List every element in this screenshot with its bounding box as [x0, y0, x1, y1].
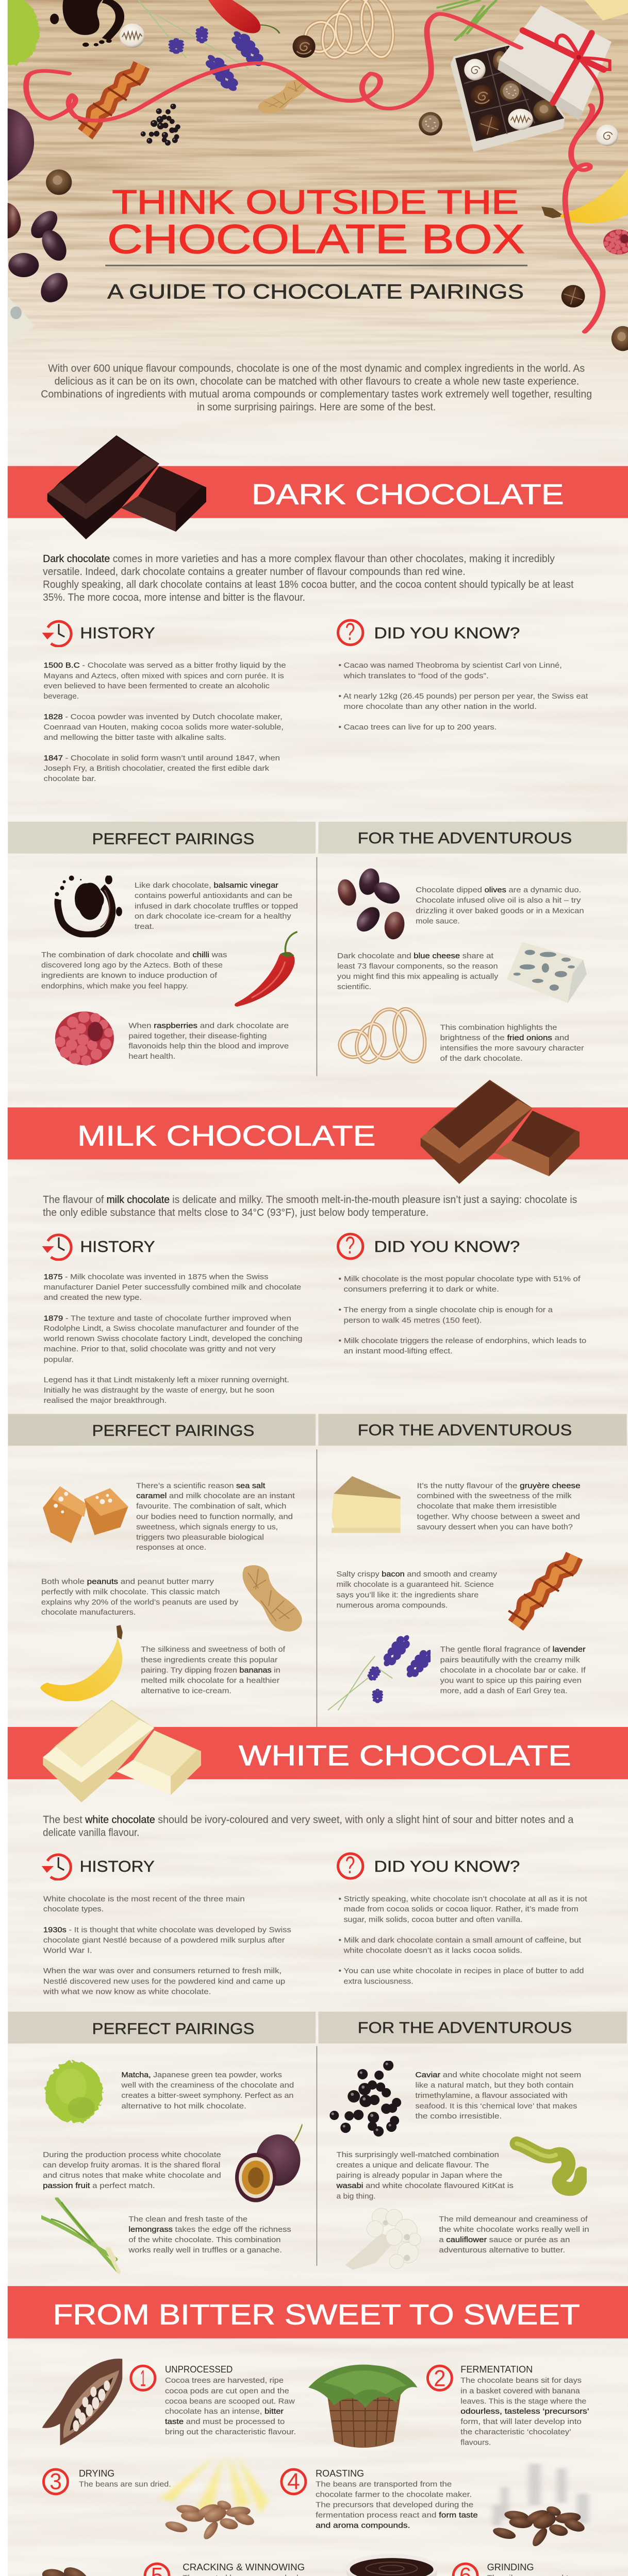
- text: history timeline: manufacturer Daniel Peter successfully combined milk and chocolate: [44, 1283, 301, 1292]
- pairing: gruyere cheese: chocolate that make them irresistible: [417, 1502, 557, 1511]
- text: did you know facts: [338, 1894, 587, 1986]
- text: did you know facts: person to walk 45 metres (150 feet).: [343, 1316, 482, 1325]
- pairing: matcha: well with the creaminess of the chocolate and: [121, 2081, 294, 2090]
- hero section: [0, 0, 628, 413]
- pairing: blue cheese: you might find this mix appealing is actually: [337, 972, 499, 981]
- text: history timeline: 1847 - Chocolate in solid form wasn’t until around 1847, when: [44, 754, 280, 762]
- pairing: raspberries: paired together, their disease-fighting: [128, 1031, 267, 1040]
- header: perfect pairings and adventurous: [8, 2012, 627, 2043]
- text: history timeline: Nestlé discovered new uses for the powdered kind and came up: [43, 1977, 285, 1986]
- step 2: fermentation: in a basket covered with banana: [460, 2386, 580, 2395]
- header: perfect pairings and adventurous: PERFECT PAIRINGS: [92, 1422, 254, 1439]
- pairing: gruyere cheese: combined with the sweetness of the milk: [417, 1492, 572, 1500]
- pairing: passion fruit: and citrus notes that make white chocolate and: [43, 2171, 221, 2180]
- step 6: grinding: [346, 2554, 589, 2576]
- pairing: passion fruit: During the production process white chocolate: [43, 2150, 221, 2159]
- text: history timeline: Coenraad van Houten, making cocoa solids more water-soluble,: [44, 723, 284, 732]
- step 1: unprocessed: UNPROCESSED: [165, 2365, 233, 2375]
- pairing: peanuts: chocolate manufacturers.: [41, 1608, 136, 1617]
- pairing: banana: melted milk chocolate for a healthier: [141, 1676, 280, 1685]
- text: history timeline: Mayans and Aztecs, often mixed with spices and corn purée. It is: [44, 671, 284, 680]
- pairing: fried onions: This combination highlights the: [440, 1023, 557, 1032]
- step 2: fermentation: flavours.: [460, 2438, 491, 2447]
- text: history timeline: beverage.: [44, 692, 79, 701]
- pairing: wasabi: creates a unique and delicate flavour. The: [337, 2161, 489, 2170]
- pairing: lavender: The gentle floral fragrance of lavender: [440, 1645, 586, 1654]
- header: perfect pairings and adventurous: PERFECT PAIRINGS: [92, 2021, 254, 2038]
- pairing: lemongrass: [41, 2198, 291, 2272]
- step 4: roasting: and aroma compounds.: [316, 2521, 410, 2530]
- illustration: onion rings: [301, 0, 398, 61]
- text: did you know facts: which translates to “food of the gods”.: [343, 671, 489, 680]
- pairing: caviar: like a natural match, but they both contain: [416, 2081, 573, 2090]
- pairing: sea salt caramel: There’s a scientific reason sea salt: [136, 1481, 266, 1490]
- illustration: chilli: [208, 0, 279, 33]
- illustration: balsamic splash: [50, 0, 120, 47]
- pairing: matcha: alternative to hot milk chocolate.: [121, 2102, 246, 2110]
- step 3: drying: 3: [49, 2469, 62, 2494]
- header: perfect pairings and adventurous: [8, 1414, 627, 1446]
- step 4: roasting: The precursors that developed during the: [316, 2500, 473, 2509]
- text: history timeline: Initially he was distraught by the waste of energy, but he soon: [44, 1386, 274, 1395]
- pairing: lemongrass: of the white chocolate. This combination: [128, 2235, 281, 2244]
- step 1: unprocessed: cocoa pods are cut open and the: [165, 2386, 289, 2395]
- illustration: raspberry: [603, 229, 628, 255]
- text: history timeline: 1828 - Cocoa powder was invented by Dutch chocolate maker,: [44, 713, 283, 721]
- icon: question mark: ?: [345, 618, 355, 645]
- step 4: roasting: 4: [287, 2469, 300, 2494]
- text: history timeline: realised the major breakthrough.: [44, 1396, 167, 1405]
- heading: history: HISTORY: [80, 1858, 155, 1875]
- step 2: fermentation: form, that will later develop into: [460, 2417, 582, 2426]
- pairing: blue cheese: Dark chocolate and blue cheese share at: [337, 952, 494, 960]
- step 6: grinding: GRINDING: [487, 2562, 534, 2572]
- heading: history: HISTORY: [80, 624, 155, 642]
- text: did you know facts: sugar, milk solids, cocoa butter and often vanilla.: [343, 1915, 523, 1924]
- pairing: peanuts: [41, 1565, 302, 1632]
- illustration: caviar: [141, 104, 180, 146]
- pairing: balsamic vinegar: treat.: [135, 922, 154, 931]
- banner: white chocolate: [8, 1700, 628, 1802]
- heading: did you know: DID YOU KNOW?: [374, 624, 520, 642]
- icon: question mark: [338, 618, 363, 645]
- pairing: chilli: discovered long ago by the Aztecs. Both of these: [41, 961, 223, 970]
- icon: history clock: [42, 1855, 71, 1879]
- intro paragraph: [43, 553, 573, 603]
- step 1: unprocessed: bring out the characteristic flavour.: [165, 2428, 296, 2436]
- step 1: unprocessed: chocolate has an intense, bitter: [165, 2407, 284, 2416]
- illustration: red ribbon: [26, 14, 603, 332]
- illustration: banana: [541, 168, 628, 223]
- header: perfect pairings and adventurous: [8, 822, 627, 854]
- pairing: blue cheese: scientific.: [337, 982, 371, 991]
- intro paragraph: delicate vanilla flavour.: [43, 1827, 139, 1838]
- pairing: balsamic vinegar: contains powerful antioxidants and can be: [135, 891, 292, 900]
- pairing: blue cheese: [337, 942, 587, 1003]
- text: did you know facts: more chocolate than any other nation in the world.: [343, 702, 537, 711]
- illustration: white truffle: [120, 24, 145, 48]
- text: history timeline: [44, 661, 286, 783]
- illustration: milk truffle: [419, 112, 442, 135]
- text: history timeline: 1875 - Milk chocolate was invented in 1875 when the Swiss: [44, 1273, 268, 1281]
- panel: dark chocolate: [8, 435, 628, 1076]
- pairing: fried onions: [336, 1006, 584, 1065]
- pairing: caviar: Caviar and white chocolate might not seem: [416, 2071, 581, 2079]
- illustration: grey truffle: [612, 326, 628, 351]
- pairing: raspberries: When raspberries and dark chocolate are: [128, 1021, 289, 1030]
- pairing: banana: [40, 1625, 286, 1702]
- header: perfect pairings and adventurous: PERFECT PAIRINGS: [92, 831, 254, 848]
- pairing: olives: Chocolate dipped olives are a dynamic duo.: [416, 886, 581, 894]
- text: did you know facts: white chocolate doesn’t as it lacks cocoa solids.: [343, 1946, 522, 1955]
- pairing: raspberries: [55, 1011, 289, 1065]
- pairing: sea salt caramel: favourite. The combination of salt, which: [136, 1502, 286, 1511]
- pairing: passion fruit: passion fruit a perfect match.: [43, 2181, 155, 2190]
- illustration: plain truffle: [561, 285, 585, 308]
- pairing: chilli: endorphins, which make you feel happy.: [41, 981, 188, 990]
- step 2: fermentation: FERMENTATION: [460, 2365, 533, 2375]
- text: history timeline: chocolate giant Nestlé because of a powdered milk surplus after: [43, 1936, 285, 1944]
- pairing: bacon: Salty crispy bacon and smooth and creamy: [337, 1570, 497, 1579]
- illustration: matcha: [0, 0, 39, 65]
- step 5: cracking and winnowing: [41, 2562, 319, 2576]
- illustration: white swirl truffle: [596, 125, 618, 146]
- icon: history clock: [42, 621, 71, 646]
- pairing: lavender: more, add a dash of Earl Grey tea.: [440, 1687, 568, 1696]
- illustration: lemongrass: [437, 0, 497, 41]
- step 4: roasting: The beans are transported from the: [316, 2480, 452, 2488]
- pairing: passion fruit: [43, 2124, 302, 2202]
- pairing: sea salt caramel: [43, 1481, 295, 1552]
- pairing: bacon: says you’ll like it: the ingredients share: [337, 1590, 478, 1599]
- pairing: banana: alternative to ice-cream.: [141, 1687, 232, 1696]
- pairing: peanuts: Both whole peanuts and peanut butter marry: [41, 1577, 214, 1586]
- intro text: in some surprising pairings. Here are some of the best.: [197, 401, 436, 413]
- pairing: banana: these ingredients create this popular: [141, 1655, 278, 1664]
- pairing: peanuts: explains why 20% of the world’s peanuts are used by: [41, 1598, 238, 1606]
- panel: milk chocolate: [8, 1080, 628, 1757]
- pairing: balsamic vinegar: on dark chocolate ice-cream for a healthy: [135, 912, 291, 921]
- pairing: caviar: trimethylamine, a flavour associated with: [416, 2091, 568, 2100]
- pairing: wasabi: [336, 2143, 582, 2200]
- text: history timeline: World War I.: [43, 1946, 92, 1955]
- pairing: lemongrass: works really well in truffles or a ganache.: [128, 2246, 282, 2255]
- step 2: fermentation: the characteristic ‘chocolatey’: [460, 2428, 571, 2436]
- pairing: balsamic vinegar: [55, 875, 298, 935]
- pairing: gruyere cheese: It’s the nutty flavour of the gruyère cheese: [417, 1481, 581, 1490]
- title: [107, 183, 525, 262]
- illustration: dark truffle: [292, 35, 316, 58]
- step 3: drying: [43, 2454, 268, 2541]
- text: history timeline: When the war was over and consumers returned to fresh milk,: [43, 1967, 282, 1975]
- pairing: sea salt caramel: responses at once.: [136, 1543, 206, 1552]
- pairing: sea salt caramel: caramel and milk chocolate are an instant: [136, 1492, 295, 1500]
- text: history timeline: even believed to have been fermented to create an alcoholic: [44, 682, 270, 690]
- text: history timeline: and mellowing the bitter taste with alkaline salts.: [44, 733, 226, 742]
- illustration: glossy truffle: [46, 170, 72, 195]
- text: history timeline: White chocolate is the most recent of the three main: [43, 1894, 245, 1903]
- pairing: passion fruit: can develop fruity aromas. It is the shared floral: [43, 2161, 220, 2170]
- text: history timeline: and created the new type.: [44, 1293, 142, 1302]
- step 2: fermentation: The chocolate beans sit for days: [460, 2376, 582, 2385]
- step 3: drying: DRYING: [79, 2468, 114, 2479]
- icon: question mark: [338, 1852, 363, 1878]
- pairing: lemongrass: lemongrass takes the edge off the richness: [128, 2225, 291, 2234]
- pairing: sea salt caramel: triggers two pleasurable biological: [136, 1533, 264, 1541]
- pairing: wasabi: wasabi and white chocolate flavoured KitKat is: [336, 2181, 514, 2190]
- icon: question mark: ?: [345, 1231, 355, 1259]
- text: history timeline: world renown Swiss chocolate factory Lindt, developed the conching: [43, 1334, 302, 1343]
- pairing: caviar: [329, 2060, 581, 2137]
- intro paragraph: [43, 1194, 577, 1218]
- step 4: roasting: [282, 2464, 589, 2549]
- text: history timeline: 1930s - It is thought that white chocolate was developed by Swiss: [43, 1925, 291, 1934]
- illustration: bacon: [78, 65, 142, 134]
- heading: did you know: DID YOU KNOW?: [374, 1858, 520, 1875]
- step 2: fermentation: 2: [434, 2366, 446, 2392]
- pairing: caviar: the combo irresistible.: [416, 2112, 502, 2121]
- text: history timeline: machine. Prior to that, solid chocolate was gritty and not very: [44, 1345, 276, 1353]
- text: did you know facts: [338, 661, 588, 732]
- pairing: sea salt caramel: our bodies need to function normally, and: [136, 1512, 293, 1521]
- step 5: cracking and winnowing: CRACKING & WINNOWING: [183, 2562, 305, 2572]
- pairing: olives: mole sauce.: [416, 917, 460, 925]
- step 1: unprocessed: taste and must be processed to: [165, 2417, 285, 2426]
- text: history timeline: chocolate types.: [43, 1905, 104, 1913]
- text: history timeline: with what we now know as white chocolate.: [43, 1987, 211, 1996]
- illustration: peanut: [258, 80, 307, 113]
- text: history timeline: 1879 - The texture and taste of chocolate further improved when: [44, 1314, 291, 1323]
- banner: from bitter sweet to sweet: [8, 2286, 628, 2338]
- text: history timeline: Legend has it that Lindt mistakenly left a mixer running overnight.: [44, 1376, 289, 1384]
- pairing: matcha: creates a bitter-sweet symphony. Perfect as an: [121, 2091, 293, 2100]
- illustration: olives: [8, 203, 72, 304]
- pairing: cauliflower: [345, 2208, 589, 2270]
- step 1: unprocessed: 1: [140, 2366, 146, 2392]
- text: did you know facts: • The energy from a single chocolate chip is enough for a: [338, 1306, 553, 1314]
- pairing: matcha: [45, 2062, 294, 2123]
- pairing: balsamic vinegar: infused in dark chocolate truffles or topped: [135, 902, 298, 910]
- illustration: plum: [8, 108, 34, 181]
- step 1: unprocessed: cocoa beans are scooped out. Raw: [165, 2397, 295, 2405]
- text: did you know facts: [338, 1275, 586, 1355]
- pairing: banana: The silkiness and sweetness of both of: [141, 1645, 286, 1654]
- text: did you know facts: • Cacao trees can live for up to 200 years.: [338, 723, 497, 732]
- step 4: roasting: fermentation process react and form taste: [316, 2511, 478, 2519]
- heading: history: HISTORY: [80, 1239, 155, 1256]
- pairing: fried onions: brightness of the fried onions and: [440, 1033, 569, 1042]
- step 1: unprocessed: [42, 2359, 296, 2445]
- title: THINK OUTSIDE THE: [112, 183, 519, 221]
- pairing: olives: [335, 866, 584, 941]
- illustration: gruyere cheese: [585, 0, 628, 21]
- intro text: [41, 363, 592, 413]
- pairing: lavender: pairs beautifully with the creamy milk: [440, 1655, 580, 1664]
- panel: white chocolate: [8, 1700, 628, 2272]
- pairing: sea salt caramel: sweetness, which signals energy to us,: [136, 1522, 278, 1531]
- intro paragraph: the only edible substance that melts close to 34°C (93°F), just below body temperature.: [43, 1207, 428, 1218]
- pairing: cauliflower: a cauliflower sauce or purée as an: [439, 2235, 570, 2244]
- text: history timeline: [43, 1273, 302, 1405]
- pairing: raspberries: heart health.: [128, 1052, 175, 1061]
- pairing: fried onions: of the dark chocolate.: [440, 1054, 523, 1063]
- pairing: gruyere cheese: [332, 1476, 581, 1533]
- pairing: wasabi: pairing is already popular in Japan where the: [337, 2171, 502, 2180]
- pairing: raspberries: flavonoids help thin the blood and improve: [128, 1042, 289, 1050]
- pairing: lavender: [327, 1631, 586, 1710]
- pairing: bacon: [337, 1556, 574, 1625]
- pairing: banana: pairing. Try dipping frozen bananas in: [141, 1666, 280, 1674]
- text: history timeline: popular.: [44, 1355, 74, 1364]
- step 2: fermentation: odourless, tasteless ‘precursors’: [460, 2407, 589, 2416]
- intro paragraph: 35%. The more cocoa, more intense and bitter is the flavour.: [43, 592, 305, 603]
- heading: did you know: DID YOU KNOW?: [374, 1239, 520, 1256]
- pairing: chilli: The combination of dark chocolate and chilli was: [41, 951, 227, 959]
- subtitle: A GUIDE TO CHOCOLATE PAIRINGS: [107, 280, 524, 303]
- text: history timeline: 1500 B.C - Chocolate was served as a bitter frothy liquid by the: [44, 661, 286, 670]
- pairing: wasabi: a big thing.: [337, 2192, 376, 2200]
- title: CHOCOLATE BOX: [107, 216, 525, 262]
- icon: question mark: [338, 1231, 363, 1259]
- pairing: wasabi: This surprisingly well-matched combination: [337, 2150, 499, 2159]
- illustration: blue cheese: [8, 297, 35, 347]
- text: history timeline: Joseph Fry, a British chocolatier, created the first edible dark: [44, 764, 269, 773]
- text: history timeline: chocolate bar.: [44, 774, 96, 783]
- text: did you know facts: extra lusciousness.: [343, 1977, 414, 1986]
- banner: dark chocolate: [8, 435, 628, 539]
- pairing: lemongrass: The clean and fresh taste of the: [128, 2215, 247, 2224]
- step 4: roasting: ROASTING: [316, 2468, 364, 2479]
- text: history timeline: Rodolphe Lindt, a Swiss chocolate manufacturer and founder of the: [44, 1324, 299, 1333]
- pairing: peanuts: perfectly with milk chocolate. This classic match: [41, 1587, 220, 1596]
- pairing: chilli: [41, 932, 298, 1007]
- illustration: chocolate box: [451, 6, 612, 151]
- pairing: bacon: milk chocolate is a guaranteed hit. Science: [337, 1580, 494, 1589]
- text: history timeline: [43, 1894, 291, 1996]
- intro paragraph: [43, 1814, 574, 1838]
- pairing: blue cheese: least 73 flavour components, so the reason: [337, 962, 498, 971]
- pairing: chilli: ingredients are known to induce production of: [41, 971, 218, 980]
- pairing: matcha: Matcha, Japanese green tea powder, works: [121, 2071, 282, 2079]
- step 3: drying: The beans are sun dried.: [79, 2480, 171, 2488]
- pairing: bacon: numerous aroma compounds.: [337, 1601, 448, 1609]
- banner: milk chocolate: MILK CHOCOLATE: [77, 1120, 376, 1152]
- panel: from bitter sweet to sweet: [8, 2286, 628, 2576]
- pairing: balsamic vinegar: Like dark chocolate, balsamic vinegar: [135, 881, 278, 890]
- banner: milk chocolate: [8, 1080, 628, 1184]
- step 4: roasting: chocolate farmer to the chocolate maker.: [316, 2490, 472, 2499]
- illustration: lavender: [138, 0, 269, 94]
- icon: history clock: [42, 1235, 71, 1260]
- pairing: cauliflower: adventurous alternative to butter.: [439, 2246, 565, 2255]
- icon: question mark: ?: [345, 1852, 355, 1878]
- step 2: fermentation: [308, 2365, 589, 2448]
- step 1: unprocessed: Cocoa trees are harvested, ripe: [165, 2376, 284, 2385]
- text: did you know facts: an instant mood-lifting effect.: [343, 1347, 453, 1355]
- text: did you know facts: consumers preferring it to dark or white.: [343, 1285, 499, 1294]
